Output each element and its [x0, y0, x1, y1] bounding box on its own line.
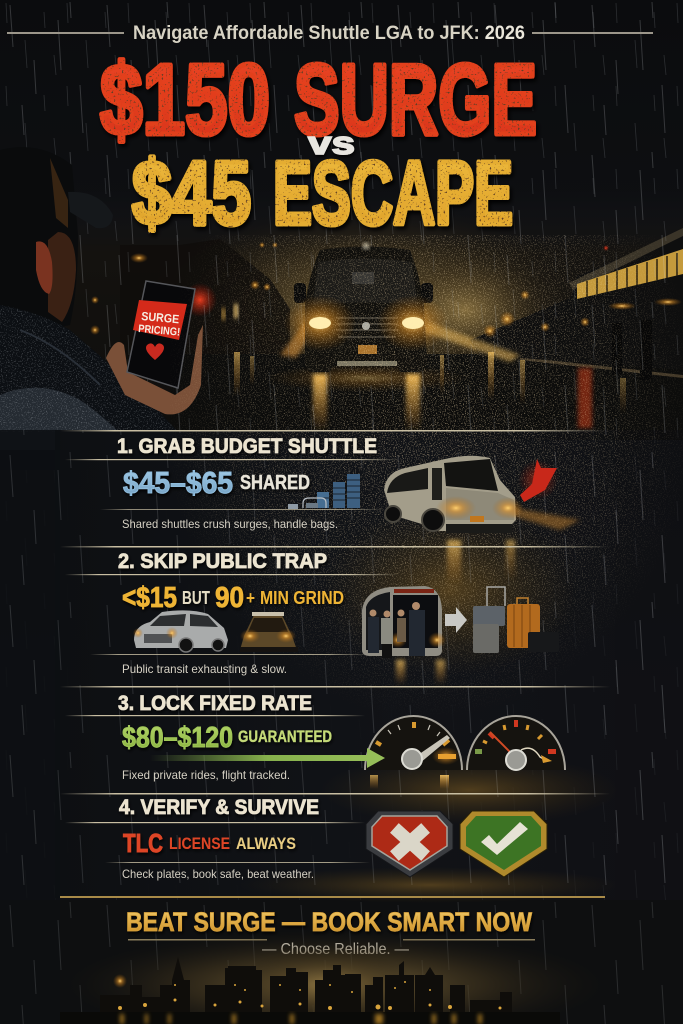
step 3 price: $80–$120 — [122, 722, 233, 754]
title: vs: vs — [308, 125, 355, 161]
step 3 price — [122, 722, 332, 754]
CTA subline: — Choose Reliable. — — [262, 941, 409, 958]
step 4 licence line: LICENSE — [169, 834, 230, 853]
step 4: verify and survive — [60, 793, 610, 881]
step 2 price: BUT — [182, 588, 210, 608]
step 3 description: Fixed private rides, flight tracked. — [122, 768, 290, 782]
step 3: lock fixed rate — [60, 686, 610, 782]
step 1 heading: 1. GRAB BUDGET SHUTTLE — [117, 435, 377, 458]
icon: green check shield — [460, 811, 547, 877]
shuttle minibus — [384, 456, 580, 533]
step 4 licence line: TLC — [123, 828, 163, 858]
hero van — [284, 243, 449, 372]
title: $45 escape: ESCAPE — [273, 144, 513, 244]
title: $150 surge: $150 — [100, 44, 270, 156]
step panels backdrop — [0, 430, 683, 1024]
step 2: skip public trap — [60, 546, 610, 676]
headlight reflections on road — [234, 322, 520, 432]
step 2 price: MIN GRIND — [260, 588, 344, 608]
title: $150 surge — [100, 44, 537, 156]
icon: red warning arrow — [518, 459, 558, 502]
step 1: grab budget shuttle — [60, 430, 605, 533]
step 1 description: Shared shuttles crush surges, handle bags. — [122, 517, 338, 531]
hand and phone with surge pricing alert — [106, 281, 203, 414]
night city skyline — [60, 930, 605, 1024]
person in cap with jacket — [0, 147, 176, 432]
step 4 description: Check plates, book safe, beat weather. — [122, 867, 314, 881]
icon: rising price bars — [288, 474, 360, 509]
step 1 price: $45–$65 — [123, 465, 233, 500]
fare gauge, needle up — [365, 716, 462, 770]
hand and phone with surge pricing alert: SURGE — [141, 309, 180, 326]
step 4 licence line: ALWAYS — [236, 834, 296, 853]
step 2 description: Public transit exhausting & slow. — [122, 662, 287, 676]
city bus with passengers — [362, 586, 446, 658]
step 2 heading: 2. SKIP PUBLIC TRAP — [118, 550, 327, 573]
title: $150 surge: SURGE — [294, 44, 537, 156]
step 3 price: GUARANTEED — [238, 727, 332, 746]
icon: red cross shield — [366, 811, 453, 877]
green arrow — [150, 748, 385, 768]
step 3 heading: 3. LOCK FIXED RATE — [118, 692, 312, 715]
step 2 price: 90 — [215, 582, 244, 614]
arrow to luggage — [445, 607, 467, 633]
distant buildings left — [90, 239, 290, 359]
CTA headline: BEAT SURGE — BOOK SMART NOW — [126, 907, 532, 937]
luggage pile — [473, 587, 559, 653]
silver SUV — [133, 610, 228, 652]
dark sedan with headlights — [240, 612, 298, 652]
step 4 licence line — [123, 828, 296, 858]
step 1 price — [123, 465, 310, 500]
title: $45 escape — [132, 144, 513, 244]
road — [170, 354, 683, 440]
step 2 price: <$15 — [122, 582, 177, 614]
title: $45 escape: $45 — [132, 144, 251, 244]
surge gauge, needle down — [467, 716, 565, 770]
step 2 price — [122, 582, 344, 614]
step 2 price: + — [246, 588, 255, 608]
wet road speckle — [173, 235, 683, 705]
terminal building right — [440, 228, 683, 428]
hand and phone with surge pricing alert: PRICING! — [138, 323, 181, 339]
call to action — [60, 896, 605, 958]
step 1 price: SHARED — [240, 472, 310, 494]
header line: Navigate Affordable Shuttle LGA to JFK: 2026 — [133, 23, 525, 44]
step 4 heading: 4. VERIFY & SURVIVE — [119, 796, 319, 819]
